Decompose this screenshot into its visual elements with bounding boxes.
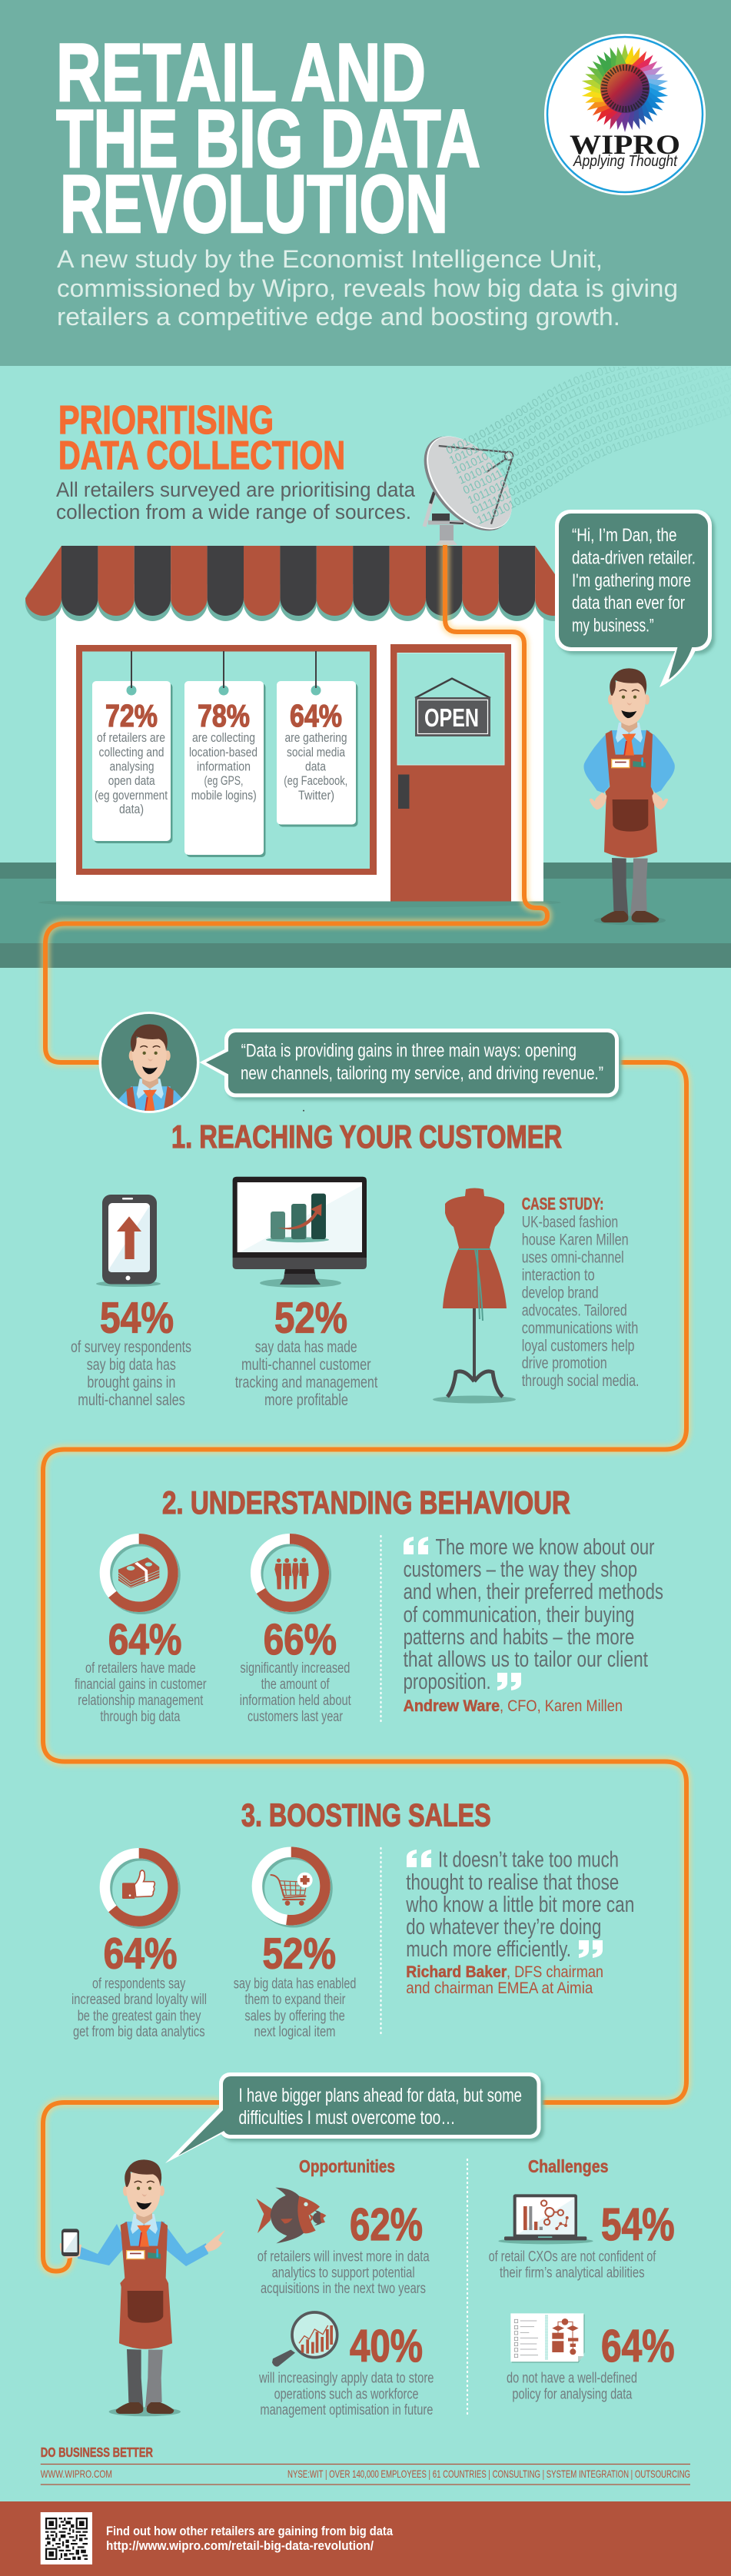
title: REVOLUTION — [60, 158, 448, 250]
stat: 64% financial gains: financial gains in customer — [75, 1677, 207, 1693]
stat: 54% CXOs: 54% — [601, 2199, 675, 2250]
icon: phone in hand — [60, 2229, 81, 2259]
footer information: DO BUSINESS BETTER — [41, 2445, 153, 2460]
tag: 72%: (eg government — [95, 788, 168, 803]
quote: Richard Baker — [406, 1848, 634, 1997]
satellite dish — [407, 420, 529, 547]
heading: opportunities: Opportunities — [299, 2156, 395, 2176]
stat: 62%: analytics to support potential — [272, 2265, 415, 2282]
data cable glow — [43, 545, 686, 2271]
subtitle: retailers a competitive edge and boosting growth. — [57, 303, 620, 331]
stat: 52% expand sales: next logical item — [254, 2024, 335, 2040]
stat: 40%: operations such as workforce — [274, 2387, 419, 2403]
section heading: prioritising data collection: DATA COLLECTION — [58, 434, 345, 478]
stat: 52% — [235, 1294, 377, 1409]
quote: Andrew Ware: that allows us to tailor our client — [404, 1647, 648, 1672]
stat: 62%: 62% — [350, 2199, 423, 2250]
donut: 64% money — [105, 1539, 175, 1609]
stat: 64% brand loyalty: 64% — [104, 1930, 177, 1979]
stat: 66% information: customers last year — [248, 1709, 343, 1725]
stat: 66% information — [240, 1615, 351, 1725]
stat: 64% brand loyalty — [71, 1930, 207, 2040]
stat: 52%: tracking and management — [235, 1374, 377, 1391]
awning — [25, 546, 572, 621]
stat: 54%: multi-channel sales — [78, 1391, 185, 1409]
stat: 62%: of retailers will invest more in data — [258, 2249, 430, 2265]
case study text: advocates. Tailored — [522, 1301, 627, 1319]
stat: 64% financial gains: of retailers have made — [85, 1660, 196, 1677]
stat: 66% information: significantly increased — [240, 1660, 350, 1677]
tag: 78%: mobile logins) — [191, 788, 257, 803]
call to action text — [106, 2524, 393, 2553]
logo: Wipro: WIPRO — [570, 129, 680, 160]
quote: Richard Baker: much more efficiently. — [406, 1937, 571, 1962]
stat: 64% policy: policy for analysing data — [512, 2387, 633, 2403]
heading: reaching your customer: 1. REACHING YOUR CUSTOMER — [171, 1118, 562, 1155]
shop shadow — [38, 897, 561, 908]
tag: 72%: 72% — [105, 698, 158, 733]
speech bubble: Dan intro: data than ever for — [572, 593, 685, 613]
tag: 72%: collecting and — [98, 745, 164, 760]
shop door — [390, 644, 511, 901]
quote: Andrew Ware: of communication, their buying — [404, 1603, 634, 1627]
header band — [0, 0, 731, 366]
subtitle: commissioned by Wipro, reveals how big data is giving — [57, 274, 678, 302]
tag: 72%: analysing — [109, 760, 154, 773]
stat: 52%: more profitable — [264, 1391, 348, 1409]
stat: 54%: 54% — [100, 1294, 174, 1343]
icon: monitor with bar chart — [233, 1177, 367, 1288]
stat: 64% financial gains: 64% — [108, 1615, 181, 1664]
case study text: develop brand — [522, 1284, 599, 1302]
tag: 64%: data — [305, 760, 326, 773]
tag: 78%: information — [197, 760, 251, 773]
call to action text: Find out how other retailers are gaining from big data — [106, 2524, 393, 2538]
quote: Andrew Ware: The more we know about our — [435, 1535, 655, 1560]
stat: 66% information: information held about — [240, 1693, 351, 1709]
quote: Richard Baker: thought to realise that those — [406, 1870, 619, 1895]
stat: 64% financial gains — [75, 1615, 207, 1725]
speech bubble: Dan intro: I'm gathering more — [572, 570, 691, 591]
quote: Andrew Ware: proposition. — [404, 1670, 491, 1694]
open sign — [415, 679, 490, 736]
stat: 64% brand loyalty: of respondents say — [92, 1976, 186, 1993]
stat: 52% expand sales — [234, 1930, 356, 2040]
tag: 72% — [92, 651, 316, 843]
stat: 40%: management optimisation in future — [260, 2402, 433, 2418]
stat: 54% — [71, 1294, 191, 1409]
data cable — [43, 545, 686, 2271]
stat: 64% brand loyalty: be the greatest gain they — [78, 2009, 201, 2025]
stat: 54% CXOs — [489, 2199, 675, 2282]
quote: Andrew Ware: , CFO, Karen Millen — [500, 1697, 623, 1715]
quote: Richard Baker: and chairman EMEA at Aimia — [406, 1979, 593, 1997]
stat: 52% expand sales: 52% — [263, 1930, 336, 1979]
tag: 78%: location-based — [189, 745, 258, 760]
stat: 52%: multi-channel customer — [241, 1356, 371, 1374]
section heading: prioritising data collection: PRIORITISING — [58, 398, 274, 443]
stat: 52% expand sales: them to expand their — [244, 1992, 346, 2008]
stat: 52% expand sales: sales by offering the — [244, 2009, 345, 2025]
quote: Richard Baker: do whatever they’re doing — [406, 1915, 601, 1939]
shop window — [76, 645, 377, 875]
tag: 64%: Twitter) — [298, 788, 334, 803]
tag: 72%: data) — [119, 802, 144, 816]
speech bubble: three main ways: “Data is providing gains in three main ways: opening — [241, 1041, 576, 1062]
quote: Andrew Ware: customers – the way they shop — [404, 1557, 637, 1582]
tag: 78%: are collecting — [192, 730, 255, 745]
quote: Andrew Ware — [404, 1535, 663, 1715]
stat: 66% information: the amount of — [261, 1677, 330, 1693]
shop building — [56, 584, 543, 901]
icon: shopping cart — [271, 1873, 313, 1906]
tag: 64%: social media — [287, 745, 345, 760]
speech bubble: three main ways — [200, 1029, 622, 1100]
stray dot — [303, 1110, 304, 1112]
section heading: prioritising data collection — [58, 398, 345, 478]
heading: boosting sales: 3. BOOSTING SALES — [241, 1797, 491, 1833]
tag: 64%: 64% — [290, 698, 342, 733]
logo: Wipro — [544, 34, 706, 195]
case study text: communications with — [522, 1319, 638, 1337]
title: THE BIG DATA — [56, 92, 480, 184]
stat: 52%: 52% — [274, 1294, 347, 1343]
tag: 72%: open data — [108, 773, 155, 788]
subtitle: A new study by the Economist Intelligence Unit, — [57, 245, 603, 273]
stat: 40% — [258, 2321, 434, 2418]
stat: 62% — [258, 2199, 430, 2297]
quote: Richard Baker: who know a little bit more can — [406, 1893, 634, 1917]
quote: Richard Baker: Richard Baker — [406, 1963, 507, 1981]
character: Dan holding a phone — [60, 2159, 225, 2416]
tag: 72%: of retailers are — [97, 730, 165, 745]
quote: Richard Baker: , DFS chairman — [507, 1963, 603, 1981]
stat: 52%: say data has made — [255, 1338, 357, 1356]
open sign: OPEN — [424, 703, 479, 732]
stat: 64% policy — [507, 2321, 675, 2403]
icon: group of people — [274, 1557, 309, 1589]
intro text: collection from a wide range of sources. — [56, 500, 411, 524]
icon: stack of banknotes — [118, 1557, 159, 1588]
case study text: drive promotion — [522, 1354, 607, 1372]
subtitle — [57, 245, 678, 331]
speech bubble: bigger plans — [165, 2072, 544, 2163]
speech bubble: Dan intro: my business.” — [572, 615, 654, 636]
case study text: uses omni-channel — [522, 1248, 624, 1267]
stat: 64% financial gains: relationship management — [78, 1693, 204, 1709]
tag: 78%: 78% — [198, 698, 250, 733]
tag: 64%: (eg Facebook, — [284, 773, 347, 788]
stat: 40%: 40% — [350, 2321, 423, 2372]
speech bubble: Dan intro: “Hi, I’m Dan, the — [572, 525, 676, 546]
quote: Andrew Ware: patterns and habits – the more — [404, 1625, 634, 1650]
character: Dan with hands on hips — [583, 668, 675, 925]
call to action text: http://www.wipro.com/retail-big-data-revolution/ — [106, 2538, 374, 2553]
stat: 64% policy: 64% — [601, 2321, 675, 2372]
case study text: UK-based fashion — [522, 1214, 618, 1231]
call to action band — [0, 2501, 731, 2576]
title: RETAIL AND — [56, 26, 426, 118]
stat: 64% financial gains: through big data — [100, 1709, 181, 1725]
donut: 64% thumbs up — [105, 1853, 175, 1923]
icon: magnifying glass over chart — [272, 2312, 337, 2367]
case study text: house Karen Millen — [522, 1231, 629, 1248]
heading: challenges: Challenges — [528, 2156, 609, 2176]
stat: 52% expand sales: say big data has enabled — [234, 1976, 356, 1993]
logo: Wipro: Applying Thought — [573, 153, 678, 170]
stat: 62%: acquisitions in the next two years — [261, 2281, 426, 2297]
tag: 78%: (eg GPS, — [204, 773, 243, 788]
stat: 64% policy: do not have a well-defined — [507, 2371, 637, 2387]
intro text: All retailers surveyed are prioritising data — [56, 478, 416, 501]
avatar: Dan portrait — [98, 1012, 200, 1113]
quote: Andrew Ware: Andrew Ware — [404, 1697, 500, 1715]
tag: 78% — [184, 651, 266, 857]
tag: 64%: are gathering — [284, 730, 347, 745]
heading: understanding behaviour: 2. UNDERSTANDING BEHAVIOUR — [162, 1484, 570, 1521]
icon: laptop with analytics — [498, 2194, 593, 2244]
icon: tailor mannequin — [433, 1188, 516, 1404]
stat: 66% information: 66% — [264, 1615, 337, 1664]
speech bubble: bigger plans: I have bigger plans ahead for data, but some — [238, 2085, 522, 2106]
speech bubble: three main ways: new channels, tailoring my service, and driving revenue.” — [241, 1063, 603, 1084]
footer information: WWW.WIPRO.COM — [41, 2468, 112, 2480]
speech bubble: Dan intro: data-driven retailer. — [572, 548, 696, 569]
icon: thumbs up — [122, 1870, 155, 1899]
stat: 54%: of survey respondents — [71, 1338, 191, 1356]
case study text: through social media. — [522, 1372, 640, 1390]
case study text: loyal customers help — [522, 1337, 635, 1354]
stat: 54% CXOs: their firm’s analytical abilities — [500, 2265, 645, 2282]
icon: smartphone with up arrow — [96, 1195, 161, 1287]
quote: Richard Baker: It doesn’t take too much — [438, 1848, 619, 1873]
case study text — [522, 1195, 640, 1390]
stat: 54% CXOs: of retail CXOs are not confident of — [489, 2249, 656, 2265]
QR code — [41, 2512, 92, 2564]
stat: 54%: say big data has — [87, 1356, 176, 1374]
icon: big fish chasing small fish — [256, 2188, 326, 2243]
donut: 66% people — [256, 1539, 326, 1609]
stat: 64% brand loyalty: get from big data analytics — [73, 2024, 205, 2040]
title — [56, 26, 480, 250]
footer information — [41, 2445, 690, 2485]
icon: policy document with flowchart — [510, 2313, 585, 2363]
ground bands — [0, 863, 731, 968]
donut: 52% shopping cart — [257, 1852, 327, 1923]
intro text — [56, 478, 416, 524]
stat: 64% brand loyalty: increased brand loyalty will — [71, 1992, 207, 2008]
case study text: CASE STUDY: — [522, 1195, 603, 1214]
stat: 40%: will increasingly apply data to store — [258, 2371, 434, 2387]
speech bubble: bigger plans: difficulties I must overcome too… — [238, 2107, 455, 2129]
speech bubble: Dan intro — [555, 510, 715, 687]
case study text: interaction to — [522, 1267, 595, 1284]
stat: 54%: brought gains in — [87, 1374, 175, 1391]
tag: 64% — [277, 651, 358, 827]
